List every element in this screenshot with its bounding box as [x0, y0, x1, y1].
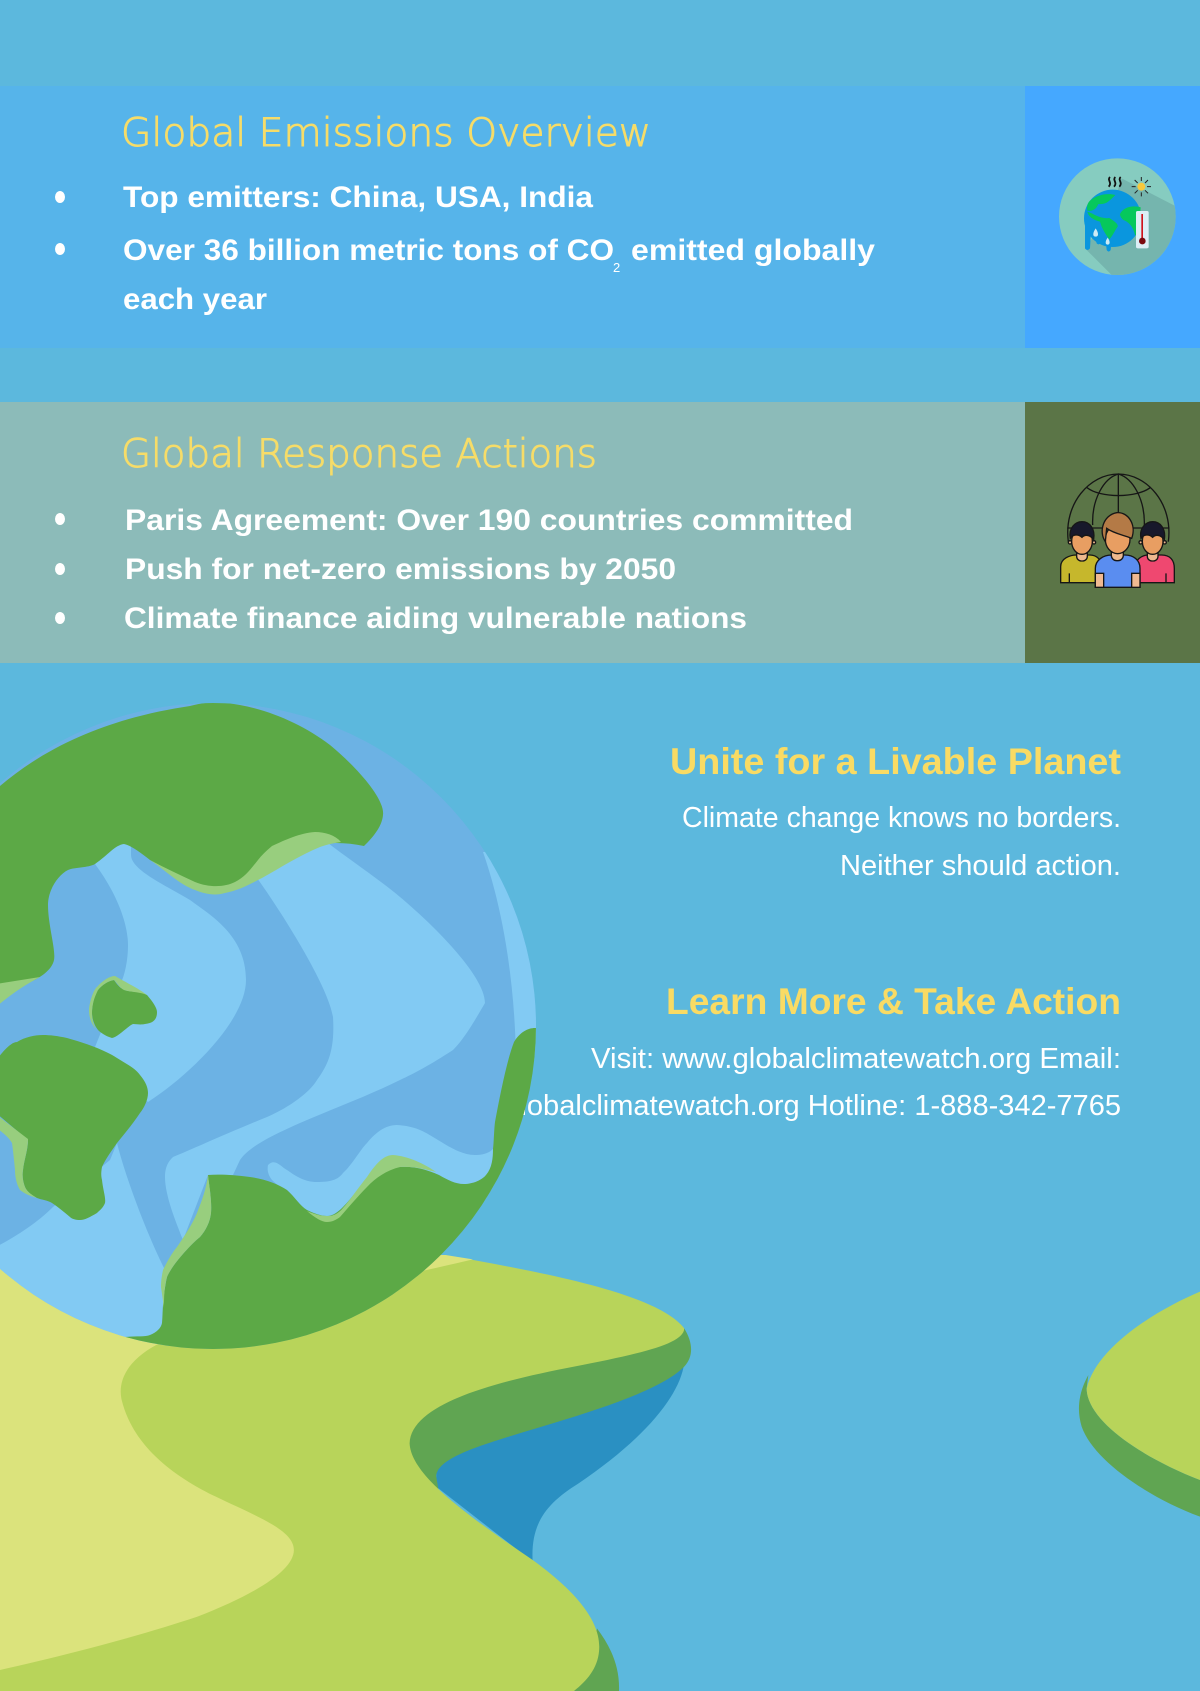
continent highlights — [0, 832, 436, 1308]
text block: learn more and take action: Visit: www.globalclimatewatch.org Email: — [591, 1043, 1121, 1075]
icon: melting earth with thermometer — [1059, 158, 1176, 275]
text block: unite for a livable planet: Neither should action. — [840, 850, 1121, 882]
text block: unite for a livable planet — [670, 741, 1121, 882]
pale hill highlight — [0, 1253, 473, 1670]
bullet list: actions: Paris Agreement: Over 190 countries committed — [125, 504, 853, 537]
continents — [0, 702, 560, 1370]
bullet list: actions — [55, 504, 853, 635]
illustration: earth globe — [0, 702, 560, 1370]
heading: global response actions: Global Response Actions — [121, 432, 597, 477]
land: main hill with river — [0, 1253, 691, 1691]
river water — [436, 1363, 684, 1562]
bullet list: emitters: Over 36 billion metric tons of CO — [123, 234, 614, 267]
bullet list: emitters — [55, 181, 875, 316]
panel: global response actions — [0, 402, 1025, 663]
text block: learn more and take action: Learn More & Take Action — [666, 981, 1121, 1022]
bullet list: emitters: Top emitters: China, USA, India — [123, 181, 593, 214]
bullet list: emitters: each year — [123, 283, 267, 316]
ocean light stripes — [0, 840, 560, 1360]
panel: global emissions overview — [0, 86, 1025, 348]
text block: learn more and take action — [428, 981, 1121, 1122]
bullet list: emitters: 2 — [613, 260, 620, 275]
text block: unite for a livable planet: Climate change knows no borders. — [682, 802, 1121, 834]
bullet list: emitters: emitted globally — [631, 234, 875, 267]
text block: learn more and take action: info@globalclimatewatch.org Hotline: 1-888-342-7765 — [428, 1090, 1121, 1122]
hill — [0, 1253, 684, 1691]
bullet list: actions: Climate finance aiding vulnerable nations — [124, 602, 747, 635]
panel: emissions icon tile — [1025, 86, 1200, 348]
panel: response icon tile — [1025, 402, 1200, 663]
icon: people in front of globe — [1061, 474, 1174, 587]
hill shadow — [404, 1328, 691, 1691]
text block: unite for a livable planet: Unite for a Livable Planet — [670, 741, 1121, 782]
land: right island — [1079, 1292, 1200, 1517]
bullet list: actions: Push for net-zero emissions by 2050 — [125, 553, 676, 586]
heading: global emissions overview: Global Emissions Overview — [121, 111, 651, 156]
